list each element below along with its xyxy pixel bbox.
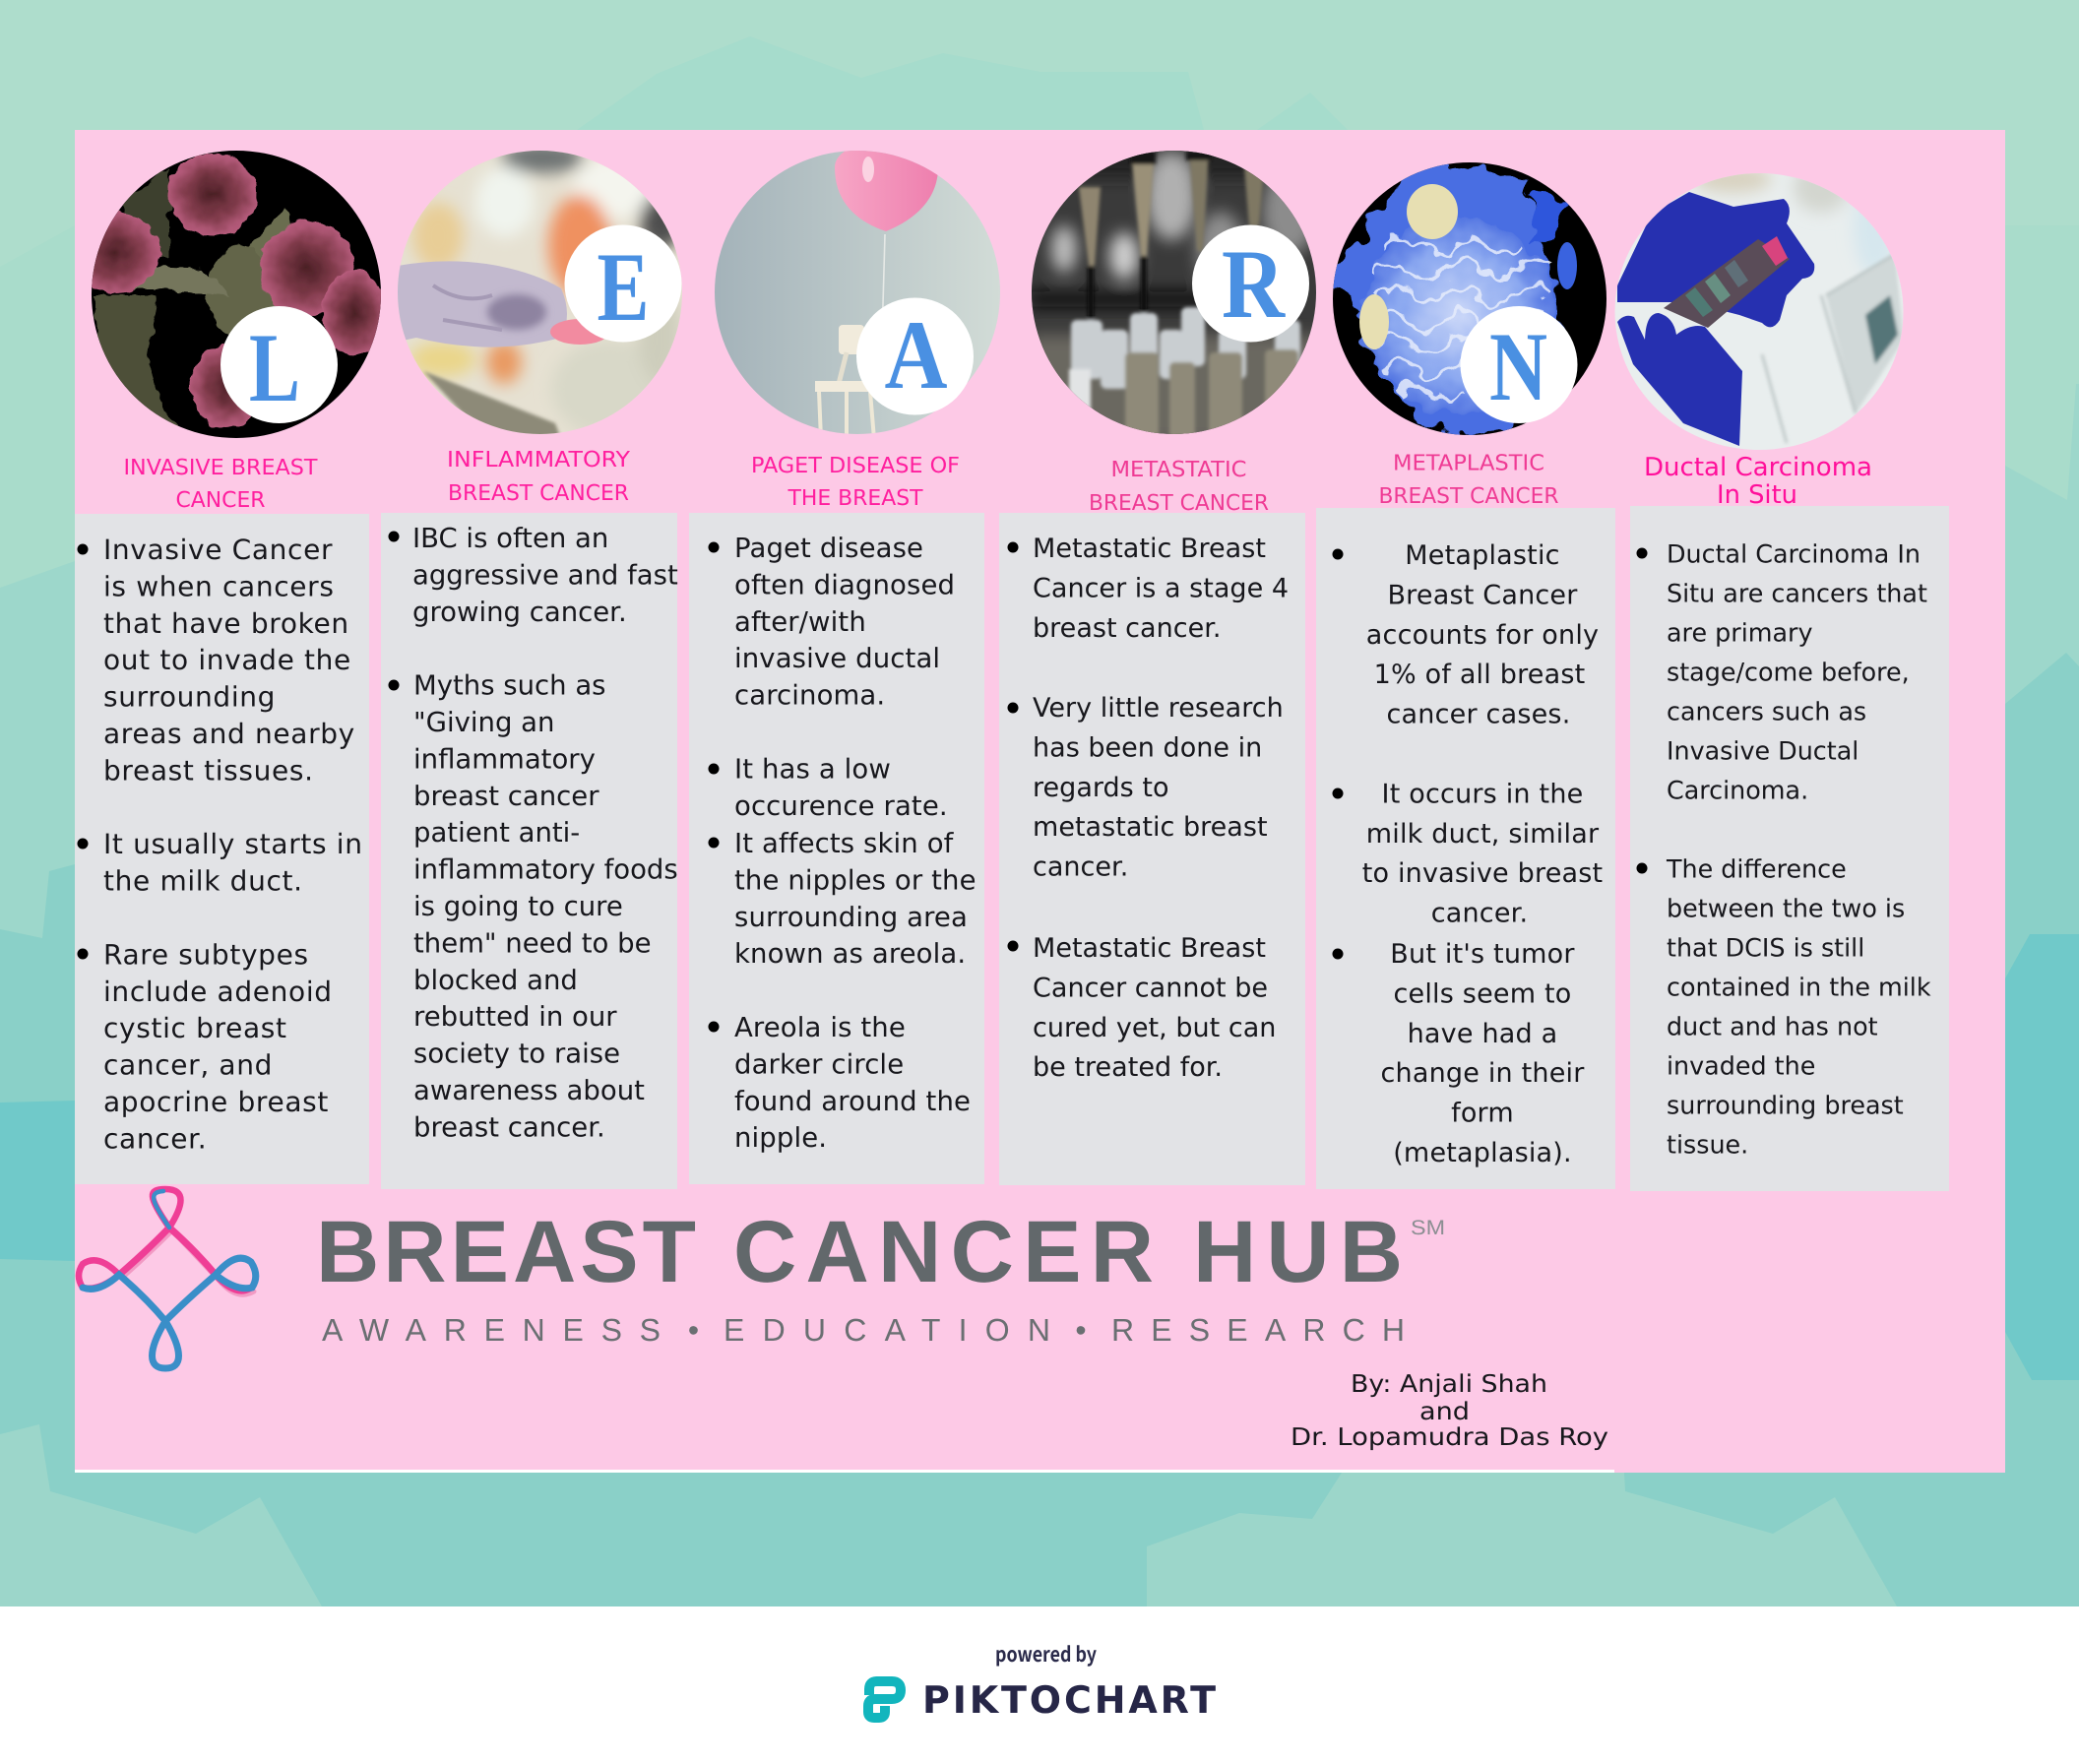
heading: ductal carcinoma in situ: Ductal Carcinoma <box>1644 453 1872 482</box>
panel: metastatic breast cancer text: cancer. <box>1033 852 1128 883</box>
footer: powered by: powered by <box>995 1639 1097 1669</box>
tagline <box>322 1312 1405 1348</box>
panel: inflammatory breast cancer text: inflammatory <box>413 743 596 775</box>
heading: inflammatory breast cancer: INFLAMMATORY <box>447 448 631 472</box>
panel: invasive breast cancer text: Invasive Cancer <box>103 534 333 566</box>
tagline: EDUCATION <box>724 1312 1050 1348</box>
panel: ductal carcinoma in situ text <box>1630 506 1949 1191</box>
letter badge N <box>1461 306 1577 423</box>
panel: ductal carcinoma in situ text: The difference <box>1666 854 1847 884</box>
panel: ductal carcinoma in situ text: Situ are cancers that <box>1667 579 1927 608</box>
panel: paget disease text: after/with <box>734 606 866 638</box>
panel: metastatic breast cancer text: Cancer cannot be <box>1033 973 1268 1003</box>
panel: ductal carcinoma in situ text: duct and has not <box>1667 1012 1878 1041</box>
panel: metaplastic breast cancer text: change in their <box>1380 1058 1585 1089</box>
footer icon: piktochart logo <box>868 1681 901 1718</box>
main pink panel <box>75 130 2005 1473</box>
panel: metaplastic breast cancer text: It occurs in the <box>1382 779 1583 809</box>
heading: metastatic breast cancer <box>1089 458 1269 516</box>
panel: metastatic breast cancer text: be treated for. <box>1033 1052 1223 1083</box>
panel: ductal carcinoma in situ text: invaded the <box>1667 1051 1815 1081</box>
panel: ductal carcinoma in situ text: contained in the milk <box>1667 973 1931 1002</box>
panel: invasive breast cancer text: the milk duct. <box>103 865 303 898</box>
panel: metaplastic breast cancer text: cells seem to <box>1394 978 1571 1009</box>
panel: ductal carcinoma in situ text: that DCIS is still <box>1667 933 1864 963</box>
panel: invasive breast cancer text: out to invade the <box>103 644 351 676</box>
panel: inflammatory breast cancer text: awareness about <box>413 1075 645 1106</box>
panel: ductal carcinoma in situ text: are primary <box>1667 618 1813 648</box>
heading: metaplastic breast cancer <box>1378 451 1559 509</box>
panel: invasive breast cancer text: breast tissues. <box>103 754 314 787</box>
panel: inflammatory breast cancer text: aggressive and fast <box>412 559 678 591</box>
panel: metastatic breast cancer text: Metastatic Breast <box>1033 933 1266 964</box>
photo circle N: blue metaplastic cell <box>1329 158 1614 443</box>
panel: paget disease text: often diagnosed <box>734 569 955 600</box>
tagline: • <box>688 1312 699 1348</box>
panel: ductal carcinoma in situ text: Carcinoma. <box>1667 776 1808 805</box>
heading: inflammatory breast cancer <box>447 448 631 506</box>
heading: paget disease of the breast <box>751 454 960 511</box>
letter badge L <box>220 306 338 423</box>
service mark: SM <box>1411 1217 1445 1239</box>
panel: ductal carcinoma in situ text: tissue. <box>1667 1130 1748 1160</box>
letter badge E <box>565 224 681 343</box>
panel: metaplastic breast cancer text: accounts for only <box>1366 620 1599 651</box>
photo circle R: lab pipettes and tubes <box>1029 148 1320 443</box>
panel: invasive breast cancer text: cancer. <box>103 1122 207 1155</box>
panel: metaplastic breast cancer text: cancer. <box>1431 899 1528 929</box>
heading: invasive breast cancer: INVASIVE BREAST <box>124 456 318 480</box>
panel: inflammatory breast cancer text: inflammatory foods <box>413 854 678 886</box>
panel: ductal carcinoma in situ text: between the two is <box>1667 894 1905 923</box>
logo text: breast cancer hub <box>316 1202 1403 1300</box>
panel: ductal carcinoma in situ text: Ductal Carcinoma In <box>1667 539 1921 569</box>
heading: ductal carcinoma in situ: In Situ <box>1717 480 1797 510</box>
panel: paget disease text: nipple. <box>734 1122 827 1154</box>
panel: inflammatory breast cancer text: blocked and <box>413 965 578 996</box>
panel: metaplastic breast cancer text: 1% of all breast <box>1374 660 1585 690</box>
credits: Dr. Lopamudra Das Roy <box>1291 1422 1608 1451</box>
panel: invasive breast cancer text: is when cancers <box>103 570 335 602</box>
heading: metaplastic breast cancer: METAPLASTIC <box>1393 451 1544 476</box>
panel: ductal carcinoma in situ text: surrounding breast <box>1667 1091 1904 1120</box>
panel: metastatic breast cancer text: regards to <box>1033 773 1169 803</box>
photo circle A: balloon and chair <box>711 142 1002 439</box>
panel: invasive breast cancer text: It usually starts in <box>103 828 363 860</box>
tagline: • <box>1075 1312 1087 1348</box>
panel: invasive breast cancer text: surrounding <box>103 681 276 714</box>
panel: metastatic breast cancer text: Very little research <box>1033 693 1284 724</box>
panel: metaplastic breast cancer text: milk duct, similar <box>1366 819 1600 850</box>
panel: invasive breast cancer text: areas and nearby <box>103 718 355 750</box>
panel: metastatic breast cancer text: metastatic breast <box>1033 812 1268 843</box>
heading: paget disease of the breast: PAGET DISEASE OF <box>751 454 960 478</box>
credits: and <box>1419 1397 1470 1425</box>
heading: metastatic breast cancer: BREAST CANCER <box>1089 491 1269 516</box>
panel: inflammatory breast cancer text <box>381 513 678 1189</box>
logo text: breast cancer hub: BREAST <box>316 1202 696 1300</box>
photo circle D: gloved hands holding test strip <box>1612 161 1908 455</box>
logo text: breast cancer hub: HUB <box>1193 1202 1403 1300</box>
panel: inflammatory breast cancer text: rebutted in our <box>413 1001 617 1033</box>
panel: metastatic breast cancer text: cured yet, but can <box>1033 1013 1276 1043</box>
panel: inflammatory breast cancer text: society to raise <box>413 1039 620 1070</box>
heading: metaplastic breast cancer: BREAST CANCER <box>1378 484 1559 509</box>
panel: metaplastic breast cancer text: to invasive breast <box>1362 858 1603 889</box>
panel: inflammatory breast cancer text: is going to cure <box>413 891 623 922</box>
panel: paget disease text: the nipples or the <box>734 864 976 896</box>
tagline: RESEARCH <box>1111 1312 1405 1348</box>
panel: metastatic breast cancer text <box>999 513 1305 1185</box>
panel: paget disease text: It has a low <box>734 753 891 785</box>
panel: metastatic breast cancer text: has been done in <box>1033 732 1262 763</box>
letter badge R: R <box>1222 229 1287 339</box>
panel: paget disease text: Areola is the <box>734 1012 906 1043</box>
credits: By: Anjali Shah <box>1351 1369 1547 1398</box>
panel: paget disease text: Paget disease <box>734 533 923 564</box>
panel: inflammatory breast cancer text: "Giving an <box>413 707 554 738</box>
panel: invasive breast cancer text: that have broken <box>103 607 349 640</box>
panel: invasive breast cancer text: Rare subtypes <box>103 938 309 971</box>
letter badge R <box>1192 224 1309 343</box>
panel: ductal carcinoma in situ text: cancers such as <box>1667 697 1866 726</box>
footer: piktochart wordmark: PIKTOCHART <box>922 1678 1216 1722</box>
panel: invasive breast cancer text: apocrine breast <box>103 1086 329 1118</box>
letter badge L: L <box>249 313 300 422</box>
panel: metaplastic breast cancer text: (metaplasia). <box>1393 1138 1572 1168</box>
heading: invasive breast cancer: CANCER <box>175 488 266 513</box>
panel: inflammatory breast cancer text: IBC is often an <box>412 523 608 554</box>
photo circle E: gloved hand in lab <box>394 142 685 439</box>
letter badge A <box>856 297 974 415</box>
letter badge A: A <box>884 300 947 410</box>
letter badge N: N <box>1489 312 1547 421</box>
panel: inflammatory breast cancer text: breast cancer. <box>413 1111 605 1143</box>
panel: paget disease text: occurence rate. <box>734 790 948 822</box>
panel: ductal carcinoma in situ text: Invasive Ductal <box>1667 736 1858 766</box>
logo text: breast cancer hub: CANCER <box>733 1202 1154 1300</box>
panel: metastatic breast cancer text: breast cancer. <box>1033 613 1221 644</box>
photo circle L: invasive cells <box>92 151 381 438</box>
panel: paget disease text: known as areola. <box>734 938 966 970</box>
panel: paget disease text: It affects skin of <box>734 828 955 859</box>
panel: paget disease text: darker circle <box>734 1048 904 1080</box>
panel: metastatic breast cancer text: Cancer is a stage 4 <box>1033 573 1289 603</box>
heading: ductal carcinoma in situ <box>1644 453 1872 510</box>
panel: paget disease text: found around the <box>734 1086 971 1117</box>
panel: paget disease text <box>689 513 984 1184</box>
panel: invasive breast cancer text: include adenoid <box>103 976 333 1008</box>
panel: inflammatory breast cancer text: them" need to be <box>413 927 652 959</box>
panel: paget disease text: surrounding area <box>734 902 968 933</box>
panel: inflammatory breast cancer text: growing cancer. <box>412 597 627 628</box>
tagline: AWARENESS <box>322 1312 661 1348</box>
heading: metastatic breast cancer: METASTATIC <box>1110 458 1246 482</box>
panel: metaplastic breast cancer text: cancer cases. <box>1387 700 1570 730</box>
panel: metaplastic breast cancer text <box>1316 508 1615 1189</box>
heading: inflammatory breast cancer: BREAST CANCER <box>448 481 629 506</box>
panel: invasive breast cancer text: cancer, and <box>103 1049 273 1082</box>
panel: metaplastic breast cancer text: But it's tumor <box>1390 939 1575 970</box>
credits <box>1291 1369 1608 1451</box>
panel: invasive breast cancer text <box>75 514 369 1184</box>
panel: paget disease text: invasive ductal <box>734 643 940 674</box>
panel: metaplastic breast cancer text: have had a <box>1408 1019 1557 1049</box>
panel: invasive breast cancer text: cystic breast <box>103 1012 287 1044</box>
logo: ribbon knot <box>79 1189 256 1368</box>
panel: metaplastic breast cancer text: Metaplastic <box>1405 540 1560 571</box>
heading: paget disease of the breast: THE BREAST <box>788 486 923 511</box>
panel: paget disease text: carcinoma. <box>734 680 885 712</box>
panel: ductal carcinoma in situ text: stage/come before, <box>1667 658 1910 687</box>
panel: metaplastic breast cancer text: form <box>1451 1099 1514 1129</box>
panel: metastatic breast cancer text: Metastatic Breast <box>1033 534 1266 564</box>
panel: metaplastic breast cancer text: Breast Cancer <box>1387 580 1578 610</box>
letter badge E: E <box>597 232 650 342</box>
panel: inflammatory breast cancer text: Myths such as <box>413 670 606 702</box>
panel: inflammatory breast cancer text: breast cancer <box>413 781 599 812</box>
heading: invasive breast cancer <box>124 456 318 513</box>
panel: inflammatory breast cancer text: patient anti- <box>413 817 580 849</box>
